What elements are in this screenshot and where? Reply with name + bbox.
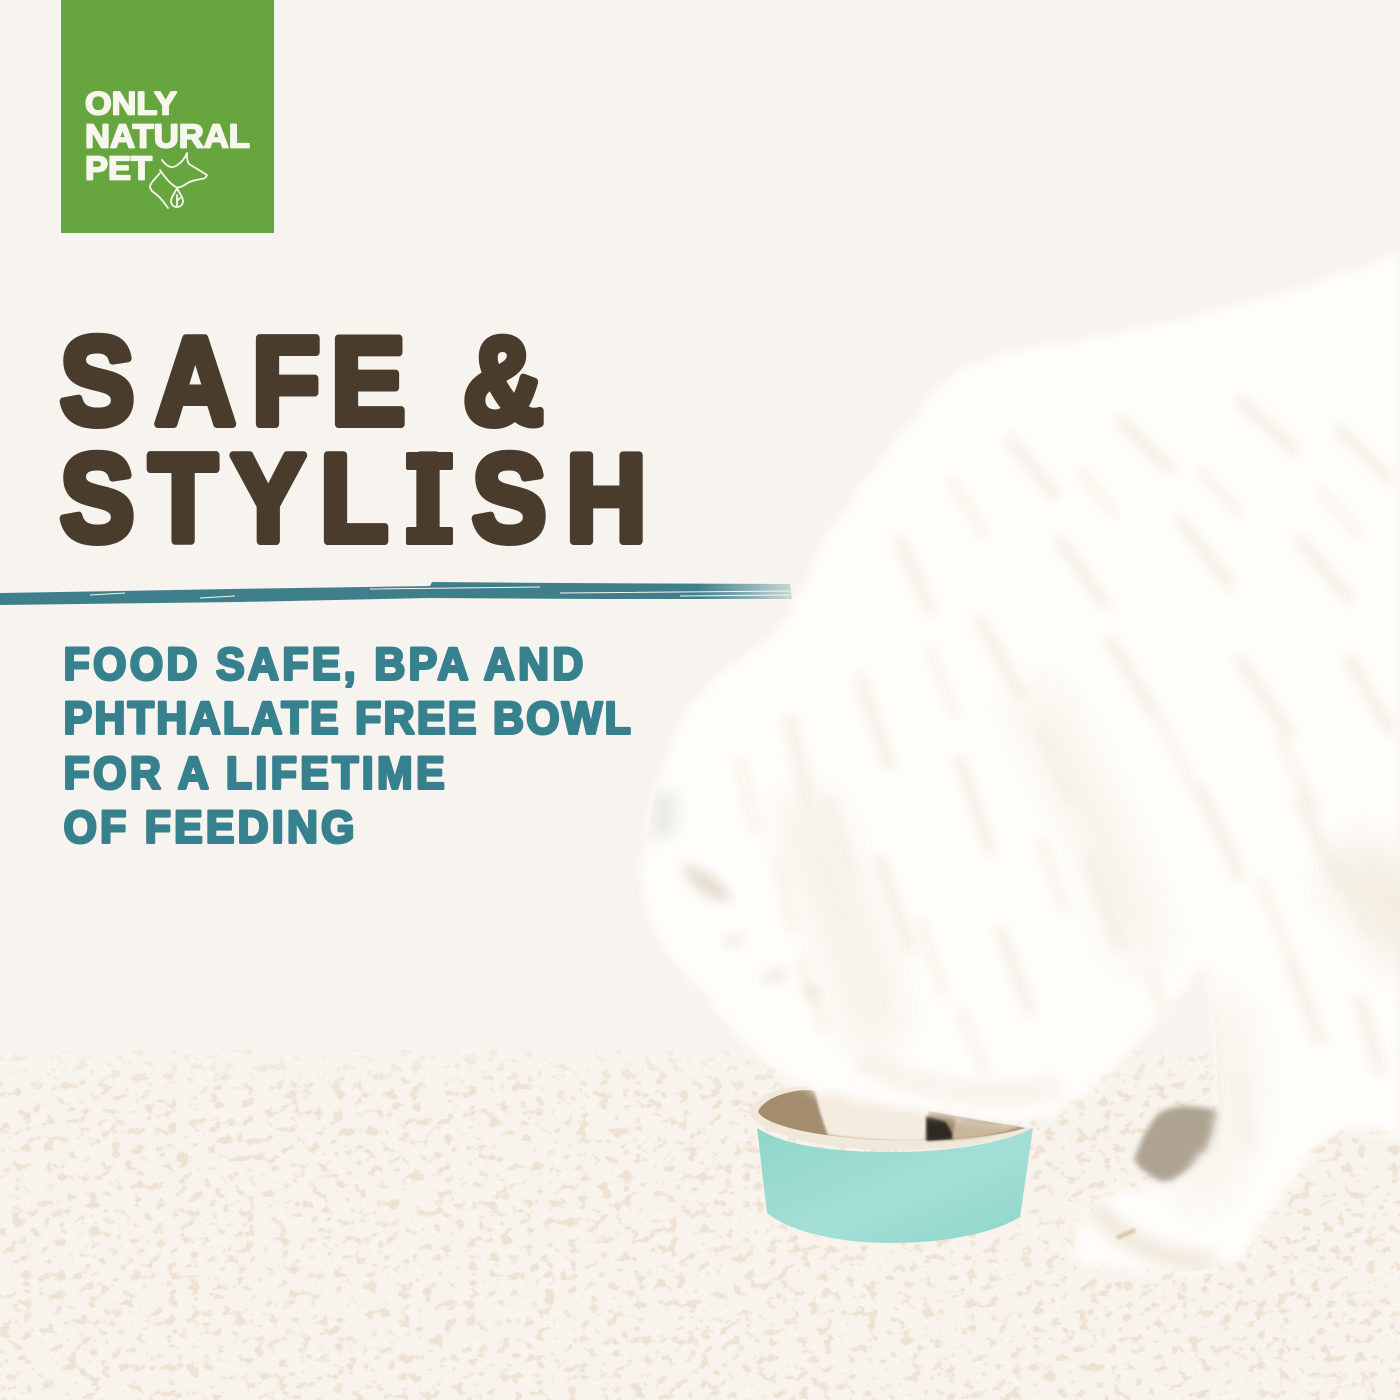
bowl xyxy=(749,1086,1033,1243)
speckled floor xyxy=(0,1050,1400,1400)
brush stroke divider xyxy=(0,582,792,605)
bowl body xyxy=(757,1128,1033,1243)
logo wordmark xyxy=(85,86,250,186)
fur streaks xyxy=(740,400,1390,1150)
subheading: OF FEEDING xyxy=(64,803,354,853)
subheading xyxy=(64,640,631,853)
ear and cheek shadows xyxy=(652,790,820,1000)
back paw in shadow xyxy=(1134,1106,1224,1183)
headline: SAFE & xyxy=(60,312,544,450)
slab serifs on the letter I xyxy=(408,454,451,543)
dog fur shading xyxy=(652,400,1400,1262)
dog xyxy=(643,240,1400,1272)
logo wordmark: NATURAL xyxy=(85,118,250,154)
subheading: FOOD SAFE, BPA AND xyxy=(64,640,583,690)
subheading: PHTHALATE FREE BOWL xyxy=(64,694,631,744)
dog muzzle in bowl xyxy=(812,1080,1020,1141)
logo badge xyxy=(61,0,274,233)
paw toe mark xyxy=(1117,1230,1135,1238)
logo wordmark: PET xyxy=(85,150,152,186)
headline: STYLISH xyxy=(60,429,647,567)
headline xyxy=(60,312,647,567)
logo wordmark: ONLY xyxy=(85,86,177,122)
dog body silhouette xyxy=(643,240,1400,1272)
logo icon: dog, cat and leaf xyxy=(150,153,207,208)
subheading: FOR A LIFETIME xyxy=(64,749,445,799)
bowl rim back and interior xyxy=(749,1086,1033,1150)
